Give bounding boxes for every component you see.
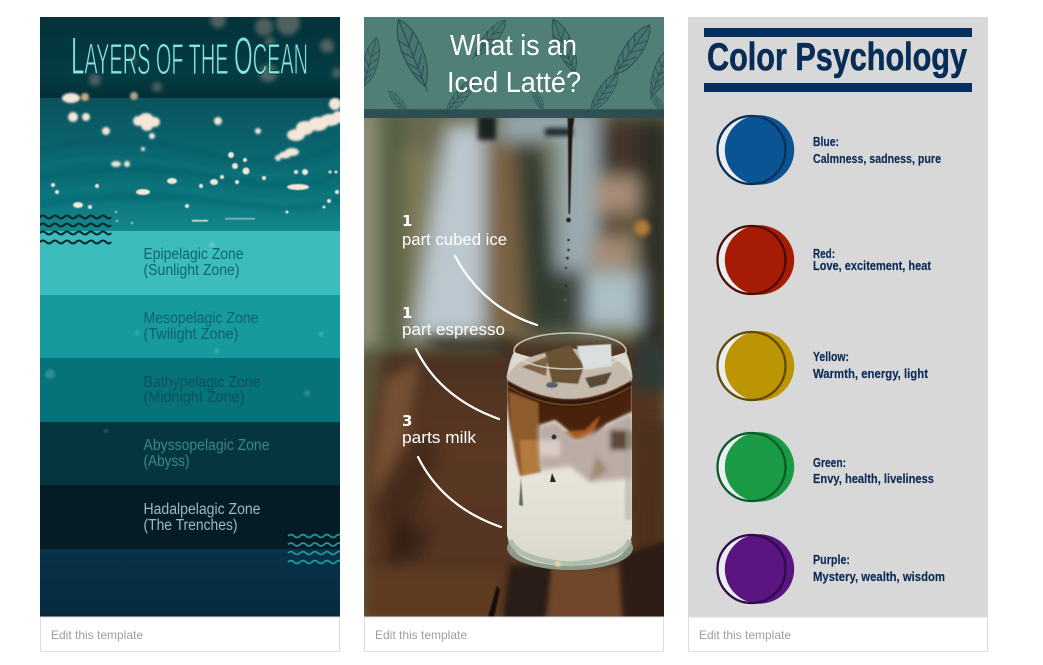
bokeh highlights in header	[89, 11, 342, 92]
color: red: Love, excitement, heat	[813, 258, 932, 273]
color: purple	[718, 534, 945, 604]
color: red: Red:	[813, 246, 835, 261]
color: blue: Blue:	[813, 134, 839, 149]
color: green: Green:	[813, 455, 846, 470]
title with rules: Color Psychology	[707, 36, 967, 79]
zone label: Bathypelagic: (Midnight Zone)	[144, 389, 244, 406]
color: blue	[718, 115, 941, 185]
zone label: Hadalpelagic	[144, 501, 260, 534]
zone label: Abyssopelagic: Abyssopelagic Zone	[144, 437, 270, 454]
title: What is an	[450, 30, 577, 62]
header band with feather pattern	[356, 15, 676, 120]
ingredient: cubed ice	[403, 215, 506, 248]
color: blue: Calmness, sadness, pure	[813, 151, 941, 166]
zone label: Mesopelagic	[144, 310, 258, 343]
title: LAYERS OF THE OCEAN	[71, 27, 308, 86]
footer: card 3: Edit this template	[699, 628, 791, 642]
footer: card 2	[364, 617, 664, 652]
teal wave marks	[288, 534, 342, 564]
footer: card 1	[40, 617, 340, 652]
zone label: Mesopelagic: (Twilight Zone)	[144, 326, 238, 343]
color: yellow: Yellow:	[813, 349, 849, 364]
ocean header band	[40, 17, 340, 98]
wooden table	[364, 340, 664, 620]
zone label: Epipelagic	[144, 246, 244, 279]
ingredient: cubed ice: 1	[402, 212, 412, 230]
ocean surface photo	[40, 98, 340, 232]
color: yellow	[718, 331, 929, 401]
ingredient: milk: 3	[402, 412, 412, 430]
zone label: Mesopelagic: Mesopelagic Zone	[144, 310, 258, 327]
panel: Color Psychology	[688, 17, 988, 617]
zone label: Bathypelagic	[144, 374, 260, 406]
ingredient: espresso	[403, 307, 504, 338]
panel: Layers of the Ocean	[40, 11, 344, 617]
zone label: Bathypelagic: Bathypelagic Zone	[144, 374, 260, 391]
color: green: Envy, health, liveliness	[813, 471, 934, 486]
footer: card 3	[688, 617, 988, 652]
coffee drip	[564, 118, 574, 301]
zone label: Hadalpelagic: Hadalpelagic Zone	[144, 501, 260, 518]
water bubbles	[51, 92, 344, 224]
zone bands	[40, 231, 340, 617]
zone label: Abyssopelagic: (Abyss)	[144, 453, 190, 470]
dark wave marks	[40, 216, 111, 244]
color: green	[718, 432, 934, 502]
ingredient: milk	[402, 412, 477, 447]
panel: What is an Iced Latté	[350, 15, 676, 620]
footer: card 1: Edit this template	[51, 628, 143, 642]
color: purple: Purple:	[813, 552, 850, 567]
title with rules	[704, 28, 972, 92]
zone label: Epipelagic: (Sunlight Zone)	[144, 262, 240, 279]
blurred cafe photo	[350, 110, 670, 620]
title: Iced Latté?	[447, 67, 581, 99]
color: purple: Mystery, wealth, wisdom	[813, 569, 945, 584]
title	[450, 34, 580, 92]
zone label: Hadalpelagic: (The Trenches)	[144, 517, 238, 534]
color: red	[718, 225, 932, 295]
footer: card 2: Edit this template	[375, 628, 467, 642]
ingredient: espresso: 1	[402, 304, 412, 322]
color: yellow: Warmth, energy, light	[813, 366, 929, 381]
ingredient: espresso: part espresso	[402, 320, 505, 339]
ingredient: milk: parts milk	[402, 428, 477, 447]
iced latte glass	[500, 333, 640, 570]
callout curves	[416, 256, 537, 527]
zone label: Abyssopelagic	[144, 437, 270, 470]
zone label: Epipelagic: Epipelagic Zone	[144, 246, 244, 263]
ingredient: cubed ice: part cubed ice	[402, 230, 507, 249]
